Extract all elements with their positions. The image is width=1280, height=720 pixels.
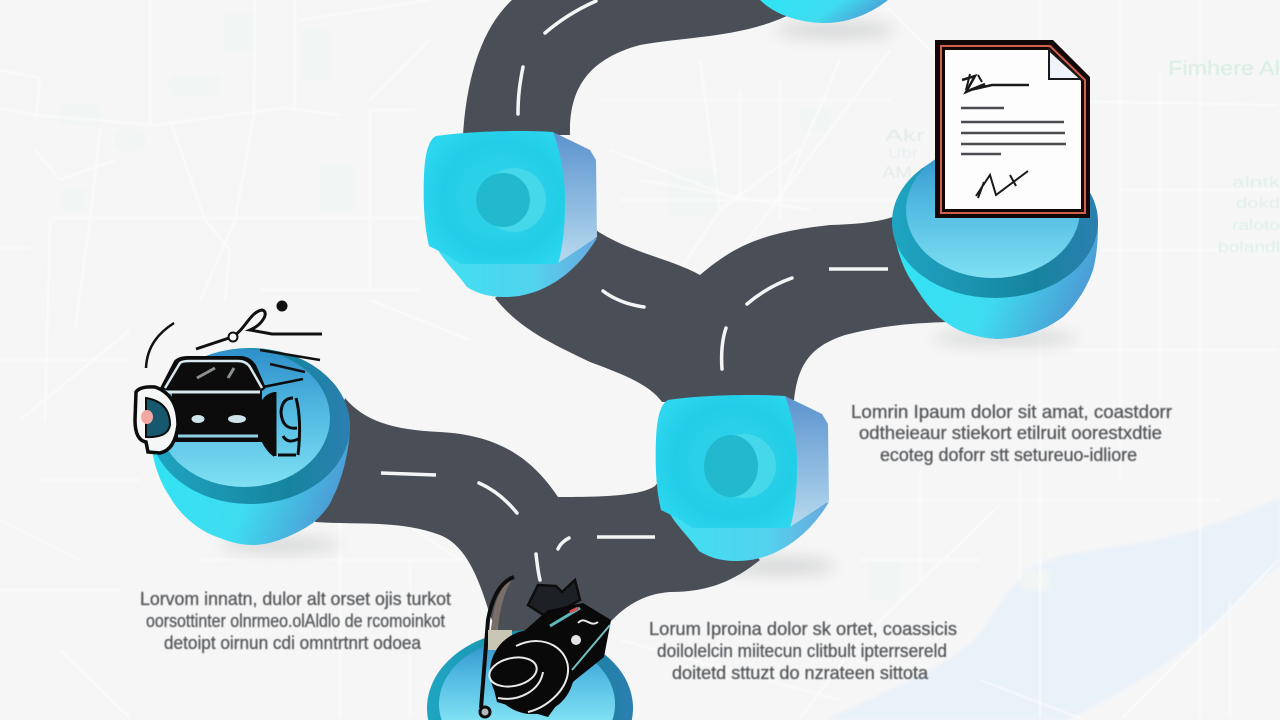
center target xyxy=(712,434,776,498)
faint background labels: Ubr xyxy=(888,145,918,162)
road: middle junction xyxy=(495,212,950,402)
road: lower curve xyxy=(315,398,760,690)
front face xyxy=(424,131,565,264)
top disc xyxy=(439,638,615,720)
road: upper curve xyxy=(463,0,795,135)
icon: car xyxy=(135,300,322,457)
top disc xyxy=(906,142,1080,278)
bowl xyxy=(152,423,350,545)
node: square 3 xyxy=(656,395,829,561)
lower bowl xyxy=(438,238,597,297)
node: top (partly cropped) xyxy=(760,0,888,23)
faint background labels: AM xyxy=(882,163,912,182)
text block: right: odtheieaur stiekort etilruit oorestxdtie xyxy=(859,423,1162,443)
text block: lower center: doitetd sttuzt do nzrateen sittota xyxy=(672,663,929,683)
text block: right: Lomrin Ipaum dolor sit amat, coastdorr xyxy=(851,402,1172,422)
faint background labels: dokd xyxy=(1236,195,1280,212)
text block: lower left: Lorvom innatn, dulor alt orset ojis turkot xyxy=(140,589,451,609)
top disc xyxy=(158,349,330,487)
lower bowl xyxy=(670,502,829,561)
ring xyxy=(892,146,1098,298)
faint background labels: alntk xyxy=(1232,174,1280,191)
side face xyxy=(785,396,829,527)
node: bottom cylinder xyxy=(427,630,633,720)
faint background labels xyxy=(882,58,1280,256)
node shadows xyxy=(220,22,1077,574)
icon: camera bag xyxy=(480,577,611,717)
text block: lower center: doilolelcin miitecun clitbult ipterrsereld xyxy=(657,641,947,661)
text block: lower center: Lorum Iproina dolor sk ortet, coassicis xyxy=(649,619,957,639)
ring xyxy=(427,630,633,720)
faint background labels: bolandl xyxy=(1218,239,1280,256)
ring xyxy=(150,348,350,504)
faint background labels: Akr xyxy=(885,126,926,145)
node: left cylinder xyxy=(150,348,350,545)
icon: signed document xyxy=(935,40,1090,218)
road dashes xyxy=(381,1,888,580)
faint background labels: Fimhere Al xyxy=(1168,58,1280,80)
node: right cylinder xyxy=(892,142,1098,339)
text block: right: ecoteg doforr stt setureuo-idliore xyxy=(880,445,1137,465)
front face xyxy=(656,395,797,528)
text block: lower left: detoipt oirnun cdi omntrtnrt odoea xyxy=(164,633,422,653)
text block: lower center xyxy=(649,619,957,683)
text block: lower left xyxy=(140,589,451,653)
side face xyxy=(553,132,597,263)
node: square 2 xyxy=(424,131,597,297)
text block: right xyxy=(851,402,1172,465)
road xyxy=(315,0,950,690)
center target xyxy=(482,168,546,232)
bowl xyxy=(893,223,1098,339)
text block: lower left: oorsottinter olnrmeo.olAldlo de rcomoinkot xyxy=(146,611,445,631)
faint background labels: raloto xyxy=(1232,217,1280,234)
